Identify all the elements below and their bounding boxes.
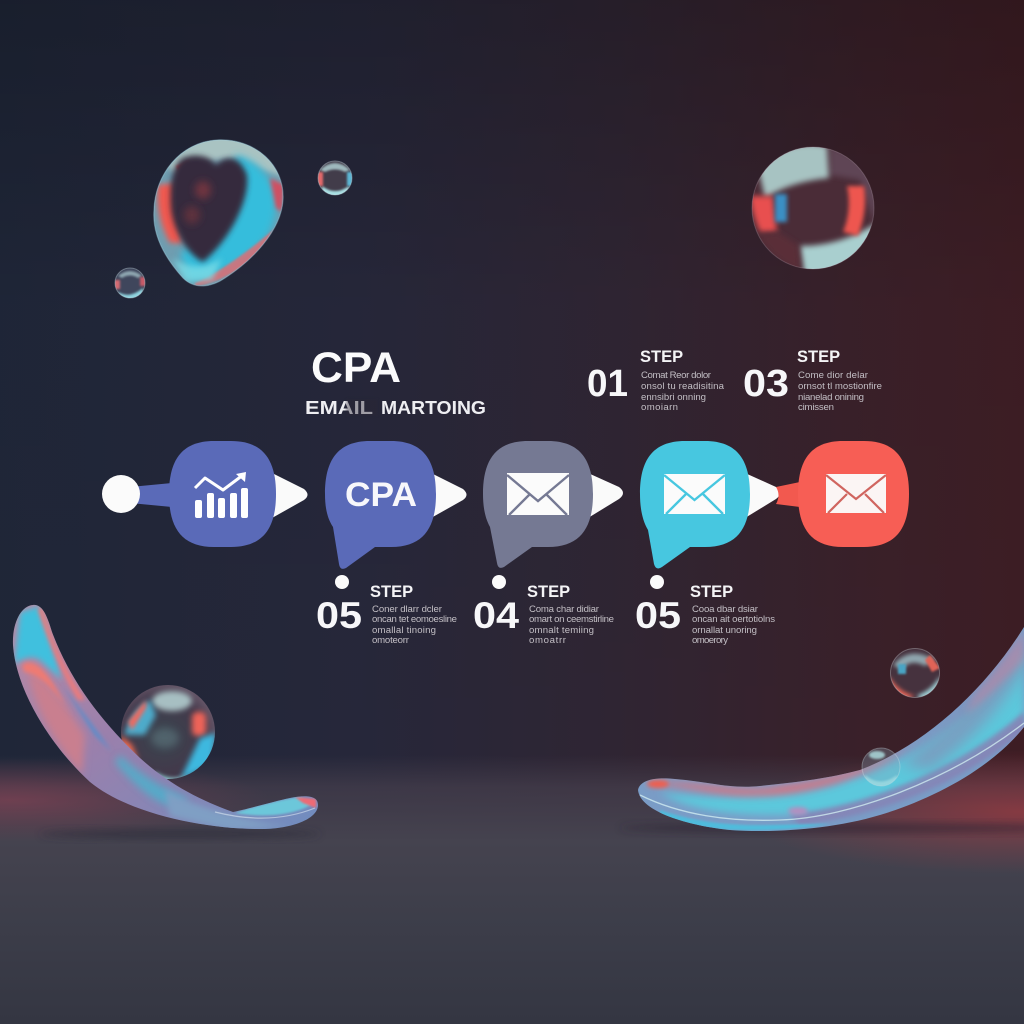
step block 03: Come dior delar	[798, 370, 869, 381]
step block 03: STEP	[797, 348, 840, 366]
bubble: small left	[114, 268, 146, 300]
lower step block 04	[473, 575, 614, 646]
step block 01: 01	[587, 363, 628, 405]
arrow pointer 3	[588, 473, 623, 518]
lower step block 04: 04	[473, 595, 519, 636]
step block 01: Comat Reor dolor	[641, 370, 712, 381]
icon label: CPA: CPA	[345, 476, 417, 514]
lower step block 05 second	[635, 575, 775, 646]
lower step block 05 second: oncan ait oertotiolns	[692, 614, 775, 625]
lower step block 05 second: STEP	[690, 583, 733, 601]
glass ribbon left	[13, 605, 318, 830]
step block 03: 03	[743, 363, 789, 405]
lower step block 05: STEP	[370, 583, 413, 601]
bubble: large sphere right	[752, 146, 874, 270]
step block 03: ornsot tl mostionfire	[798, 381, 882, 392]
step block 03	[743, 348, 882, 413]
floor shadows	[40, 823, 1024, 839]
lower step block 04: STEP	[527, 583, 570, 601]
pod 5: envelope red	[798, 441, 909, 547]
arrow pointer 2	[431, 473, 466, 518]
pod 1: chart	[169, 441, 276, 547]
step block 01: onsol tu readisitina	[641, 381, 725, 392]
lower step block 05 second: ornallat unoring	[692, 625, 757, 636]
connector to final pod	[776, 482, 800, 507]
bubble: small on right ribbon	[862, 748, 900, 788]
step block 03: cimissen	[798, 402, 834, 413]
glass ribbon right	[638, 627, 1024, 831]
icon: envelope	[826, 474, 886, 513]
step block 01: omoiarn	[641, 402, 678, 413]
glass ball left	[120, 685, 216, 785]
step block 01	[587, 348, 725, 413]
arrow pointer 1	[272, 473, 308, 518]
subtitle: Email Marketing: MARTOING	[381, 397, 486, 418]
lower step block 04: omart on ceemstirline	[529, 614, 614, 625]
pod 2: CPA	[325, 441, 436, 569]
arrow pointer 4	[745, 473, 780, 518]
start node with connector	[102, 475, 172, 513]
lower step block 05: 05	[316, 595, 362, 636]
step block 03: nianelad onining	[798, 392, 864, 403]
bubble: small top centre	[317, 161, 353, 198]
lower step block 05: Coner dlarr dcler	[372, 604, 443, 615]
lower step block 04: omnalt temiing	[529, 625, 594, 636]
lower step block 04: Coma char didiar	[529, 604, 600, 615]
icon: envelope	[664, 474, 725, 514]
step block 01: ennsibri onning	[641, 392, 706, 403]
lower step block 05: omoteorr	[372, 635, 410, 646]
lower step block 05: omallal tinoing	[372, 625, 436, 636]
icon: envelope	[507, 473, 569, 515]
bubble: small right floating	[890, 648, 940, 698]
lower step block 05	[316, 575, 457, 646]
pod 4: envelope cyan	[640, 441, 750, 568]
icon: rising chart	[195, 472, 248, 518]
bubble: large heart-shaped drop	[154, 132, 290, 286]
subtitle: Email Marketing	[305, 397, 486, 418]
title: CPA: CPA	[311, 344, 401, 392]
subtitle: Email Marketing: EMAIL	[305, 397, 373, 418]
lower step block 05: oncan tet eomoesline	[372, 614, 457, 625]
lower step block 05 second: 05	[635, 595, 681, 636]
pod 3: envelope grey	[483, 441, 593, 568]
lower step block 05 second: omoerory	[692, 635, 728, 646]
lower step block 04: omoatrr	[529, 635, 567, 646]
lower step block 05 second: Cooa dbar dsiar	[692, 604, 759, 615]
step block 01: STEP	[640, 348, 683, 366]
